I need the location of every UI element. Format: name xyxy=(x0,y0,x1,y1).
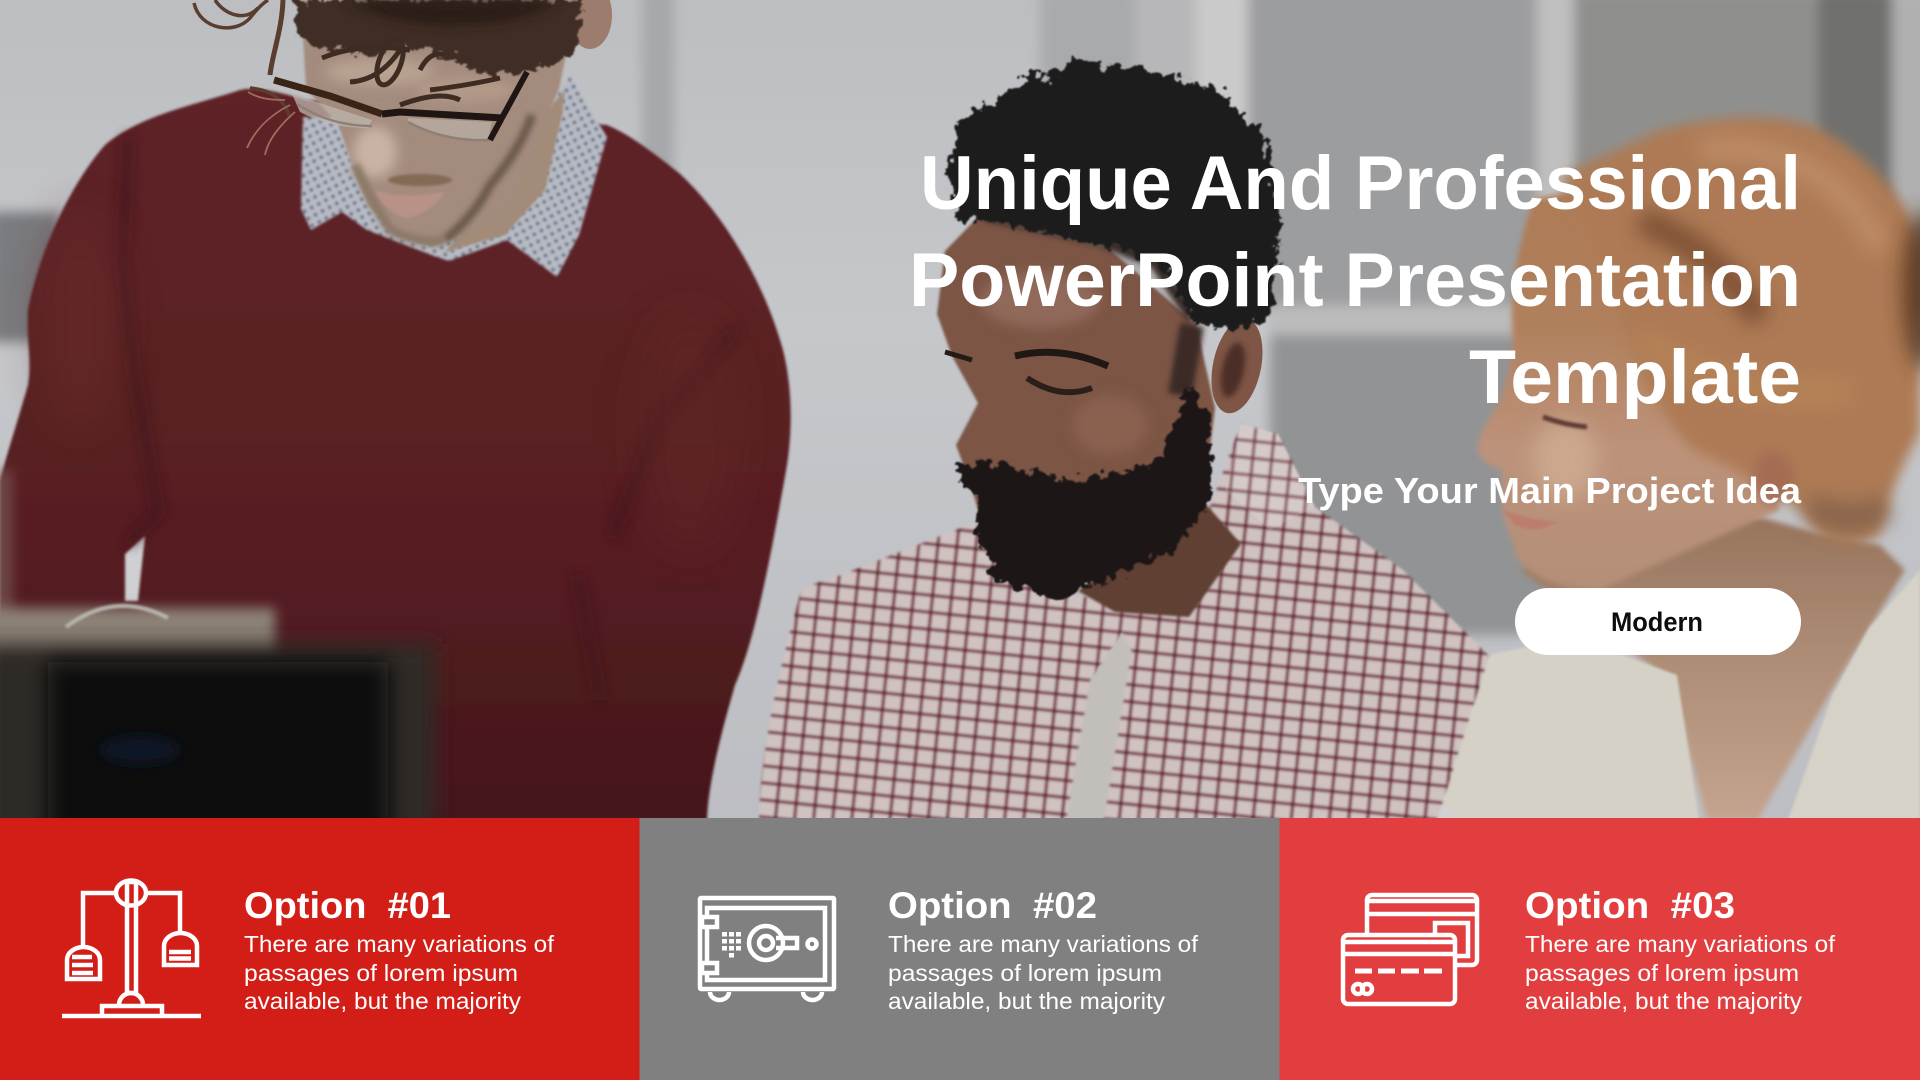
option 02 body text xyxy=(888,931,1199,1014)
left man: neck xyxy=(445,90,565,252)
option 01 body text: passages of lorem ipsum xyxy=(244,960,518,986)
icon: safe keypad xyxy=(722,932,741,958)
centre man: neck xyxy=(1078,502,1241,617)
blurred paper xyxy=(1337,769,1463,820)
left man: face xyxy=(301,0,612,247)
right woman: face xyxy=(1478,180,1780,590)
option 01 body text: available, but the majority xyxy=(244,988,522,1014)
option 02 heading: Option #02 xyxy=(888,885,1097,926)
option 01 heading: Option #01 xyxy=(244,885,451,926)
title xyxy=(909,141,1801,420)
title: Template xyxy=(1469,335,1801,420)
photo background: office wall and window bands xyxy=(0,0,1920,820)
option 03 body text xyxy=(1525,931,1836,1014)
right woman: hair xyxy=(1560,118,1920,544)
left man: curly hair xyxy=(194,0,582,155)
photo: three colleagues at a monitor xyxy=(0,0,1920,844)
option 03 heading: Option #03 xyxy=(1525,885,1735,926)
button: Modern: Modern xyxy=(1611,607,1703,637)
panel: option 03 xyxy=(1280,818,1920,1080)
left man: sweater xyxy=(0,89,791,820)
option 02 body text: There are many variations of xyxy=(888,931,1199,957)
centre man: spiky black hair xyxy=(949,58,1281,329)
left man: checked collar xyxy=(301,77,607,277)
button: Modern xyxy=(1515,588,1801,655)
option 01 body text xyxy=(244,931,555,1014)
title: Unique And Professional xyxy=(920,141,1801,226)
option 02 body text: passages of lorem ipsum xyxy=(888,960,1162,986)
option 03 body text: passages of lorem ipsum xyxy=(1525,960,1799,986)
option 03 body text: There are many variations of xyxy=(1525,931,1836,957)
option 01 body text: There are many variations of xyxy=(244,931,555,957)
right woman: cream blouse xyxy=(1437,570,1920,820)
icon: safe xyxy=(700,898,834,1000)
centre man: face xyxy=(937,217,1270,523)
option 03 body text: available, but the majority xyxy=(1525,988,1803,1014)
left man: glasses xyxy=(274,72,527,140)
subtitle: Type Your Main Project Idea xyxy=(1298,470,1802,511)
icon: credit cards xyxy=(1343,895,1477,1004)
centre man: checked shirt xyxy=(759,424,1489,820)
title: PowerPoint Presentation xyxy=(909,238,1801,323)
panel: option 02 xyxy=(640,818,1280,1080)
panel: option 01 xyxy=(0,818,640,1080)
option 02 body text: available, but the majority xyxy=(888,988,1166,1014)
left foreground: hand and blurred monitor xyxy=(0,606,435,844)
icon: balance scale xyxy=(62,880,201,1016)
centre man: beard xyxy=(956,387,1211,601)
right woman: neck and chest xyxy=(1520,500,1905,820)
